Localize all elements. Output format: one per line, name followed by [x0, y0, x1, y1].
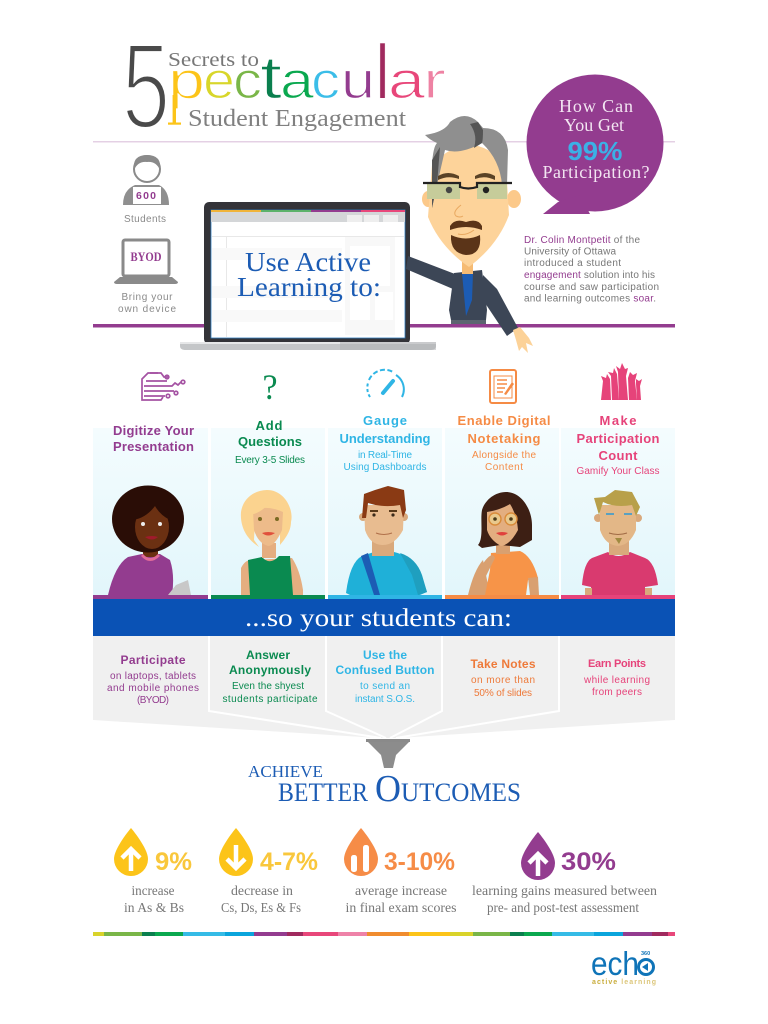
heading: add questions: Questions [238, 434, 302, 449]
title: 5 [122, 18, 170, 154]
laptop [180, 202, 436, 350]
heading: enable digital notetaking: Alongside the [472, 450, 536, 461]
label: bring your own device [118, 292, 176, 315]
heading: gauge understanding: Understanding [340, 431, 431, 446]
title: t [260, 44, 282, 111]
character: professor [406, 116, 533, 353]
outcome: earn points: from peers [592, 687, 642, 698]
caption: average increase [346, 883, 456, 915]
speech bubble [526, 74, 664, 214]
icon: BYOD laptop: BYOD [130, 249, 162, 264]
outcome: take notes: Take Notes [470, 657, 536, 671]
panel: questions [211, 428, 325, 599]
title: c [233, 52, 262, 110]
caption: decrease in Cs Ds Es Fs: decrease in [231, 883, 293, 898]
outcome: answer anonymously: Anonymously [229, 663, 311, 677]
stat: 9% [114, 828, 192, 876]
character: student 1 [108, 486, 191, 595]
caption: increase in As and Bs: increase [132, 883, 175, 898]
outcome: participate: on laptops, tablets [110, 671, 196, 682]
stat: 9%: 9% [155, 848, 192, 876]
label: students: Students [124, 214, 166, 225]
text: Dr. Colin Montpetit [524, 235, 659, 304]
character: student 3 [346, 486, 427, 595]
heading: add questions: Every 3-5 Slides [235, 455, 305, 466]
heading: make participation count: Participation [576, 431, 660, 446]
title: a [280, 52, 314, 110]
heading: use active learning to: Use Active [245, 247, 371, 277]
heading: enable digital notetaking: Enable Digital [458, 413, 550, 428]
text: Dr. Colin Montpetit: University of Ottawa [524, 246, 616, 258]
title: Student Engagement [188, 106, 406, 132]
stat: 3-10%: 3-10% [384, 848, 455, 876]
panel: participation [561, 428, 675, 599]
icon: student 600: 600 [136, 190, 156, 202]
caption: decrease in Cs Ds Es Fs [221, 883, 301, 915]
heading: digitize your presentation: Digitize Your [113, 423, 194, 438]
outcome: answer anonymously [222, 648, 318, 705]
outcome: confused button: instant S.O.S. [355, 694, 415, 705]
label: bring your own device: Bring your [122, 292, 173, 303]
label: bring your own device: own device [118, 304, 176, 315]
outcome: answer anonymously: Answer [246, 648, 290, 662]
title: l [376, 30, 389, 115]
heading: add questions [235, 418, 305, 466]
outcome: take notes [470, 657, 536, 699]
heading: achieve better outcomes: O [375, 768, 401, 810]
text: Dr. Colin Montpetit: course and saw participation [524, 282, 659, 293]
outcome: answer anonymously: Even the shyest [232, 681, 304, 692]
heading: gauge understanding: Using Dashboards [344, 462, 426, 473]
heading: achieve better outcomes: UTCOMES [401, 778, 521, 807]
heading: gauge understanding: Gauge [363, 413, 407, 428]
banner: so your students can [93, 599, 675, 636]
outcome: take notes: on more than [471, 675, 535, 686]
title: c [311, 52, 340, 110]
panel: digitize [93, 428, 208, 599]
icon: digital document [142, 373, 185, 400]
text: Dr. Colin Montpetit: Dr. Colin Montpetit of the [524, 235, 640, 246]
caption: increase in As and Bs [124, 883, 184, 915]
caption: learning gains: pre- and post-test assessment [487, 900, 639, 915]
stat: 4-7%: 4-7% [260, 848, 318, 876]
caption: average increase: in final exam scores [346, 900, 456, 915]
icon: question mark: ? [262, 367, 278, 407]
outcome: earn points: Earn Points [588, 658, 646, 670]
panel: gauge [328, 428, 442, 599]
heading: add questions: Add [256, 418, 283, 433]
caption: average increase: average increase [355, 883, 447, 898]
stat: 30% [521, 832, 616, 880]
title: u [341, 52, 375, 110]
colour strip [93, 932, 675, 936]
icon: student 600 [123, 155, 169, 205]
caption: learning gains [472, 883, 657, 915]
outcome: earn points: while learning [583, 675, 650, 686]
outcome: confused button [336, 648, 434, 705]
speech bubble: 99% [568, 136, 622, 166]
title: p [168, 52, 205, 110]
heading: achieve better outcomes [248, 762, 521, 810]
heading: enable digital notetaking: Content [485, 462, 523, 473]
heading: make participation count [576, 413, 660, 477]
caption: increase in As and Bs: in As & Bs [124, 900, 184, 915]
character: student 5 [582, 490, 658, 595]
text: Dr. Colin Montpetit: introduced a student [524, 258, 621, 269]
heading: gauge understanding [340, 413, 431, 473]
heading: make participation count: Make [600, 413, 636, 428]
heading: gauge understanding: in Real-Time [358, 450, 412, 461]
outcome: take notes: 50% of slides [474, 688, 532, 699]
title: r [423, 52, 446, 110]
heading: use active learning to [237, 247, 381, 302]
panel: funnel outcomes area [93, 636, 675, 738]
banner: so your students can: ...so your students can: [245, 605, 512, 632]
heading: digitize your presentation: Presentation [113, 439, 194, 454]
logo: echo: ech [591, 945, 639, 982]
stat: 30%: 30% [561, 848, 616, 876]
text: Dr. Colin Montpetit: and learning outcomes soar. [524, 294, 656, 304]
icon: funnel [366, 739, 410, 768]
title: a [388, 52, 425, 110]
outcome: participate: Participate [120, 653, 186, 667]
outcome: participate [107, 653, 199, 706]
logo: echo: 360 [641, 951, 650, 957]
outcome: confused button: Confused Button [336, 663, 434, 677]
heading: make participation count: Gamify Your Class [576, 466, 660, 477]
icon: BYOD laptop [114, 240, 178, 284]
heading: achieve better outcomes: BETTER [278, 778, 369, 807]
title: e [203, 52, 235, 110]
text: Dr. Colin Montpetit: engagement solution into his [524, 270, 655, 281]
caption: decrease in Cs Ds Es Fs: Cs, Ds, Es & Fs [221, 900, 301, 915]
outcome: confused button: Use the [363, 648, 407, 662]
heading: enable digital notetaking [458, 413, 550, 473]
panel: notetaking [445, 428, 559, 599]
stat: 4-7% [219, 828, 318, 876]
outcome: participate: and mobile phones [107, 683, 199, 694]
speech bubble: How Can [559, 96, 633, 116]
heading: make participation count: Count [598, 448, 638, 463]
icon: raised hands [601, 363, 642, 400]
heading: digitize your presentation [113, 423, 194, 454]
heading: enable digital notetaking: Notetaking [468, 431, 541, 446]
title [122, 18, 446, 154]
outcome: confused button: to send an [360, 681, 410, 692]
speech bubble: You Get [564, 115, 624, 135]
stat: 3-10% [344, 828, 455, 876]
character: student 4 [468, 492, 539, 595]
heading: use active learning to: Learning to: [237, 272, 381, 302]
character: student 2 [241, 490, 303, 595]
title: Secrets to [168, 49, 259, 71]
speech bubble: Participation? [542, 162, 650, 182]
heading: achieve better outcomes: ACHIEVE [248, 762, 323, 781]
outcome: earn points [583, 658, 650, 698]
outcome: answer anonymously: students participate [222, 694, 318, 705]
caption: learning gains: learning gains measured between [472, 883, 657, 898]
icon: tablet [490, 370, 516, 403]
outcome: participate: (BYOD) [137, 695, 169, 706]
logo: echo: active learning [592, 979, 656, 986]
icon: gauge [367, 370, 404, 397]
